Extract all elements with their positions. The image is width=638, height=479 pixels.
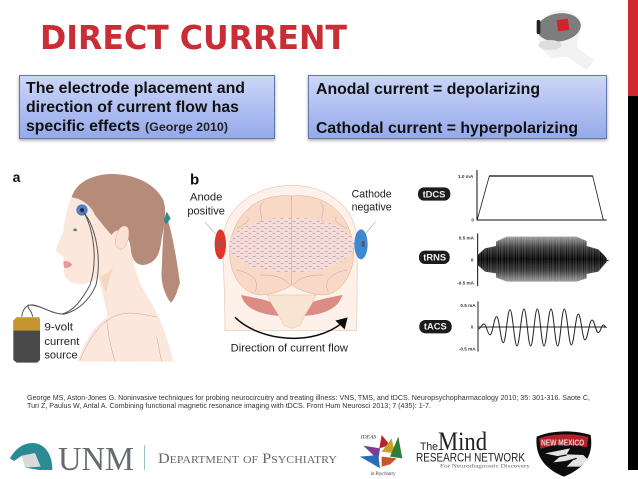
chart: tDCS: 1.0 mA: [458, 174, 474, 179]
chart: tRNS: [419, 233, 609, 286]
panel label a: a: [13, 169, 21, 185]
logo: IDEAS: IDEAS: [360, 435, 377, 441]
sulci: [237, 196, 347, 292]
electrode: [76, 204, 88, 216]
icon: brain with red stimulation area: [535, 10, 594, 70]
UNM dome: [10, 443, 52, 470]
logo: UNM Department of Psychiatry: Department of Psychiatry: [158, 451, 337, 467]
panel a: head with battery: [13, 169, 180, 363]
title: DIRECT CURRENT: [40, 18, 347, 57]
text box: anodal and cathodal: Cathodal current = hyperpolarizing: [316, 120, 578, 137]
logo: The Mind Research Network: The: [420, 441, 438, 453]
chart: tACS: [419, 301, 607, 352]
citation text: Turi Z, Paulus W, Antal A. Combining functional magnetic resonance imaging with tDCS. Front Hum Neurosci 2013; 7 (435): 1-7.: [27, 401, 431, 410]
head outline: [223, 185, 357, 331]
panel b: brain with anode and cathode: Cathode: [352, 188, 392, 200]
chart: tDCS: 0: [471, 218, 474, 223]
wires: [22, 212, 98, 317]
citation text: George MS, Aston-Jones G. Noninvasive techniques for probing neurocircuitry and treating illness: VNS, TMS, and tDCS. Neuropsychopharmacology 2010; 35: 301-316. Saote C,: [27, 393, 590, 402]
logo: New Mexico Lobos: [536, 431, 591, 477]
logo: IDEAS: [360, 435, 402, 477]
current field: [229, 218, 354, 272]
text box: anodal and cathodal: Anodal current = depolarizing: [316, 81, 540, 98]
shoulder line: [80, 313, 162, 362]
eye: [73, 228, 77, 231]
panel b: brain with anode and cathode: [187, 171, 392, 355]
chart: tACS: 0.5 mA: [460, 303, 476, 308]
chart: tACS: tACS: [424, 322, 447, 332]
chart: tRNS: 0.5 mA: [459, 235, 475, 240]
lips: [63, 261, 72, 268]
cerebellum: [241, 295, 342, 316]
text box: electrode placement: The electrode placement and: [26, 80, 245, 97]
logo: The Mind Research Network: RESEARCH NETWORK: [416, 450, 525, 464]
brain stem: [267, 295, 316, 328]
cathode electrode: [354, 229, 368, 259]
text box: electrode placement: specific effects: [26, 118, 140, 135]
panel a: head with battery: current: [44, 336, 79, 348]
citation text: [27, 393, 590, 410]
panel b: brain with anode and cathode: positive: [187, 205, 225, 217]
text box: electrode placement: (George 2010): [145, 122, 228, 134]
skin of head and shoulder: [56, 197, 173, 362]
panel a: head with battery: source: [44, 349, 78, 361]
battery label: 9-volt: [44, 322, 73, 334]
battery: [13, 317, 40, 363]
logo: New Mexico Lobos: NEW MEXICO: [541, 439, 584, 448]
ear: [116, 226, 129, 249]
right edge strip: [628, 0, 638, 470]
text box: electrode placement: direction of current flow has: [26, 99, 239, 116]
logo: The Mind Research Network: For Neurodiagnostic Discovery: [440, 464, 530, 470]
hair: [72, 174, 165, 265]
neck shading: [100, 263, 115, 292]
panel b: brain with anode and cathode: Direction of current flow: [231, 343, 348, 355]
chart: tACS: 0: [471, 325, 474, 330]
logo: IDEAS: in Psychiatry: [371, 472, 396, 477]
text box: anodal and cathodal: [308, 76, 606, 138]
chart: tRNS: -0.5 mA: [457, 281, 475, 286]
leader lines: [205, 222, 376, 234]
logo: The Mind Research Network: Mind: [438, 427, 487, 456]
text box: electrode placement: [20, 76, 274, 138]
stimulation waveform charts: [418, 170, 609, 352]
labels: b: [190, 171, 199, 188]
current arrow: [235, 317, 342, 338]
logo: UNM Department of Psychiatry: UNM: [58, 441, 134, 478]
ponytail: [162, 215, 180, 303]
chart: tRNS: 0: [471, 258, 474, 263]
chart: tACS: -0.5 mA: [459, 347, 476, 352]
chart: tDCS: [418, 170, 607, 223]
logo: The Mind Research Network: [416, 427, 530, 470]
chart: tRNS: tRNS: [423, 252, 446, 262]
cortex: [229, 196, 354, 295]
panel b: brain with anode and cathode: Anode: [190, 192, 222, 204]
hair band: [164, 212, 171, 225]
logo: UNM Department of Psychiatry: [10, 441, 337, 478]
panel b: brain with anode and cathode: negative: [352, 202, 392, 214]
anode electrode: [215, 229, 226, 259]
chart: tDCS: tDCS: [423, 189, 445, 199]
